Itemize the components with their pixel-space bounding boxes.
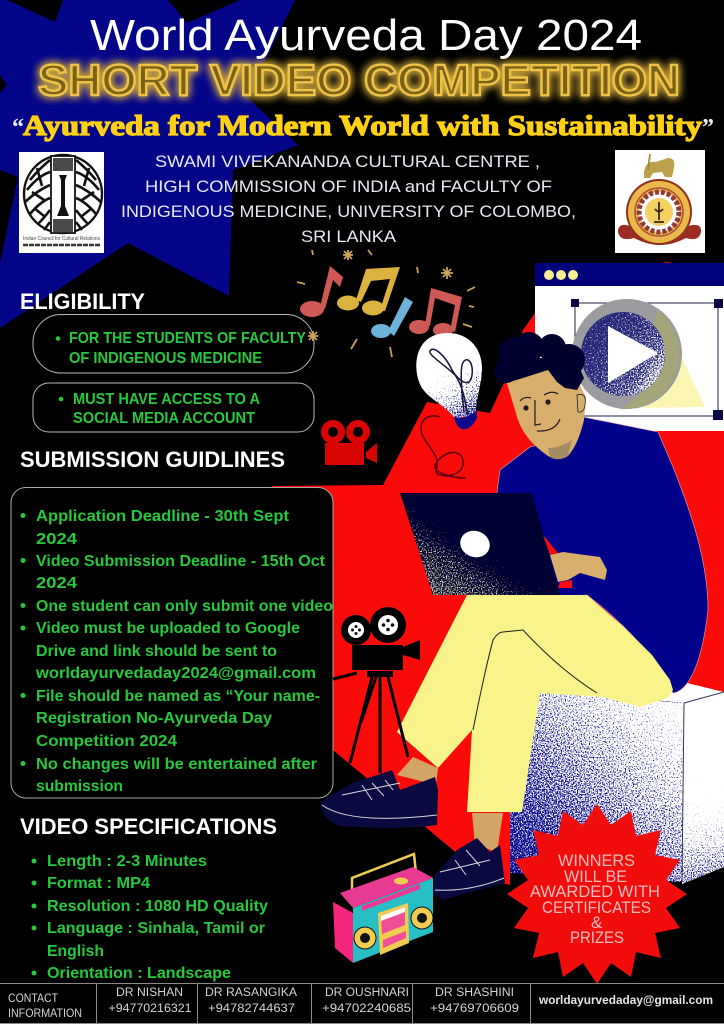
sweater <box>497 417 708 693</box>
contact information bar: INFORMATION <box>8 1008 82 1020</box>
contact information bar: +94769706609 <box>430 1003 519 1015</box>
eligibility pill 1: FOR THE STUDENTS OF FACULTY <box>69 330 307 347</box>
contact information bar: DR RASANGIKA <box>205 987 297 999</box>
organisers text: SWAMI VIVEKANANDA CULTURAL CENTRE , <box>155 152 540 171</box>
illustration: seated man with laptop <box>320 332 724 900</box>
video specifications list: Language : Sinhala, Tamil or <box>47 920 265 937</box>
theme tagline: “ <box>12 115 24 141</box>
contact information bar: +94782744637 <box>208 1003 295 1015</box>
submission guidelines panel: Registration No-Ayurveda Day <box>36 710 272 727</box>
contact information bar: DR SHASHINI <box>435 987 514 999</box>
submission guidelines panel: One student can only submit one video <box>36 598 333 615</box>
red gap at arm <box>543 535 558 555</box>
contact information bar: +94702240685 <box>322 1003 411 1015</box>
eligibility pill 1: OF INDIGENOUS MEDICINE <box>69 350 262 367</box>
face <box>506 366 586 459</box>
submission guidelines panel: Drive and link should be sent to <box>36 643 277 660</box>
trousers <box>397 595 673 812</box>
contact information bar: CONTACT <box>8 993 58 1005</box>
submission guidelines panel: submission <box>36 778 123 795</box>
eligibility pill 2: SOCIAL MEDIA ACCOUNT <box>73 410 255 427</box>
eligibility pill 1 <box>33 314 314 373</box>
video player window <box>535 262 724 431</box>
neon subtitle: SHORT VIDEO COMPETITION <box>38 56 680 105</box>
blue star background shape <box>0 0 298 328</box>
callout: winners burst: PRIZES <box>570 928 624 947</box>
video specifications list <box>32 853 268 982</box>
logo: Indian Council for Cultural Relations: Indian Council for Cultural Relations <box>23 236 100 242</box>
callout: winners burst: CERTIFICATES <box>542 898 651 917</box>
video specifications list: Length : 2-3 Minutes <box>47 853 207 870</box>
eligibility pill 2 <box>33 383 314 432</box>
logo: University of Colombo crest <box>615 150 705 253</box>
submission guidelines panel: File should be named as “Your name- <box>36 688 320 705</box>
contact information bar: worldayurvedaday@gmail.com <box>538 995 713 1007</box>
organisers text <box>121 152 576 246</box>
heading: eligibility: ELIGIBILITY <box>20 289 145 314</box>
hair <box>494 332 585 390</box>
facial features <box>520 392 560 431</box>
left shoe <box>320 770 438 828</box>
submission guidelines panel: No changes will be entertained after <box>36 756 317 773</box>
contact information bar: DR NISHAN <box>116 987 183 999</box>
hand <box>550 552 607 582</box>
video specifications list: English <box>47 943 104 960</box>
ankles <box>397 757 438 785</box>
contact information bar: +94770216321 <box>108 1003 192 1015</box>
submission guidelines panel <box>11 488 333 798</box>
video specifications list: Format : MP4 <box>47 875 150 892</box>
callout: winners burst: AWARDED WITH <box>530 882 660 901</box>
video specifications list: Resolution : 1080 HD Quality <box>47 898 268 915</box>
contact information bar: DR OUSHNARI <box>325 987 409 999</box>
callout: winners burst: WINNERS <box>558 851 635 870</box>
eligibility pill 2: MUST HAVE ACCESS TO A <box>73 391 260 408</box>
submission guidelines panel: 2024 <box>36 531 77 548</box>
video specifications list: Orientation : Landscape <box>47 965 231 982</box>
icon: music notes <box>300 266 462 338</box>
submission guidelines panel: Video must be uploaded to Google <box>36 620 300 637</box>
submission guidelines panel: Video Submission Deadline - 15th Oct <box>36 553 325 570</box>
icon: light bulb with wire <box>416 333 482 478</box>
red background shape <box>272 313 724 885</box>
sparkles around music notes <box>297 250 475 357</box>
submission guidelines panel: 2024 <box>36 575 77 592</box>
submission guidelines panel: Application Deadline - 30th Sept <box>36 508 289 525</box>
callout: winners burst: WILL BE <box>564 867 627 886</box>
contact information bar <box>0 983 724 1024</box>
organisers text: SRI LANKA <box>301 227 397 246</box>
right shoe <box>433 838 505 900</box>
neck shadow <box>548 440 572 459</box>
title: World Ayurveda Day 2024 <box>90 11 642 60</box>
icon: film projector on tripod <box>333 607 420 773</box>
laptop <box>400 493 560 595</box>
heading: submission guidelines: SUBMISSION GUIDLINES <box>20 447 285 472</box>
submission guidelines panel: Competition 2024 <box>36 733 177 750</box>
theme tagline: Ayurveda for Modern World with Sustainability <box>23 110 703 142</box>
theme tagline: ” <box>702 115 714 141</box>
heading: video specifications: VIDEO SPECIFICATIONS <box>20 814 277 839</box>
icon: red video camera <box>321 420 377 465</box>
seat box <box>510 683 724 884</box>
logo: Indian Council for Cultural Relations <box>19 152 104 253</box>
icon: boombox <box>333 854 433 963</box>
organisers text: HIGH COMMISSION OF INDIA and FACULTY OF <box>145 177 552 196</box>
organisers text: INDIGENOUS MEDICINE, UNIVERSITY OF COLOMBO, <box>121 202 576 221</box>
callout: winners burst <box>507 804 687 984</box>
callout: winners burst: & <box>591 913 603 932</box>
submission guidelines panel: worldayurvedaday2024@gmail.com <box>35 665 316 682</box>
